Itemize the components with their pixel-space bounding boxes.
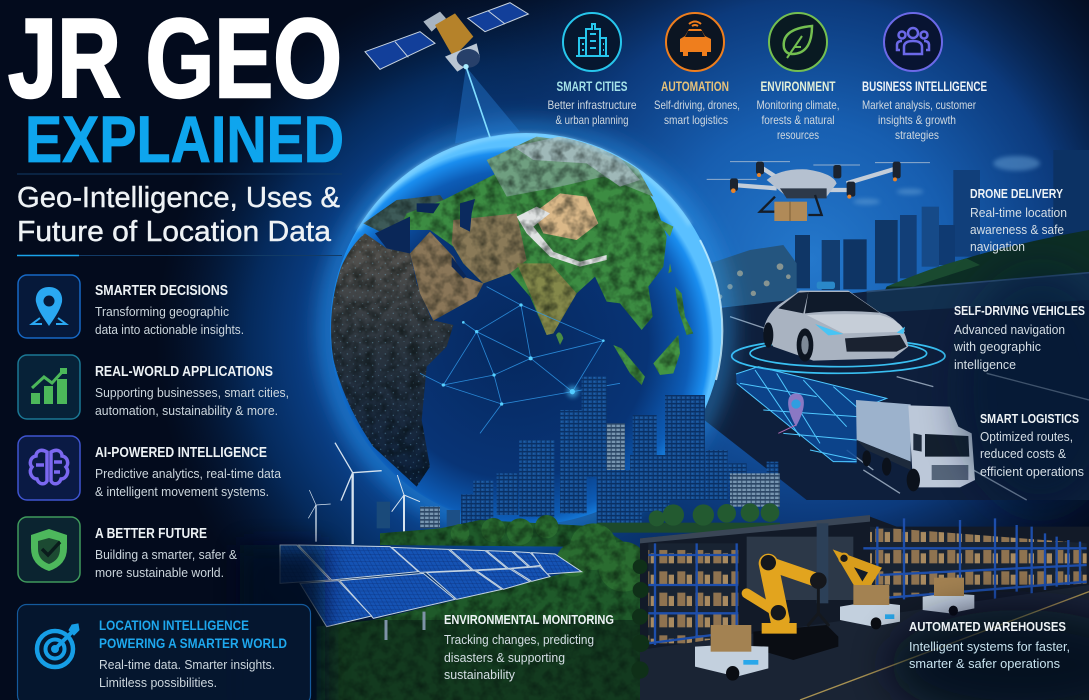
- text: business intelligence: Market analysis, customer: [862, 98, 976, 112]
- panel: smart cities: [548, 13, 637, 127]
- icon: connected car: [666, 13, 724, 71]
- icon: brain: [18, 436, 80, 500]
- text: ai-powered intelligence: [95, 445, 282, 499]
- continents: [327, 135, 693, 487]
- label: self-driving vehicles: with geographic: [953, 339, 1041, 354]
- panel: environment: [756, 13, 840, 142]
- callout text: Limitless possibilities.: [99, 675, 217, 690]
- callout text: [99, 618, 287, 690]
- wind turbines: [308, 443, 420, 544]
- text: real-world applications: [95, 364, 289, 418]
- label: self-driving vehicles: intelligence: [954, 357, 1016, 372]
- clouds: [853, 156, 1040, 205]
- floor: [640, 585, 1089, 700]
- foliage: [317, 515, 653, 700]
- scene: central city, wind turbines and solar farm: [280, 377, 780, 700]
- text: business intelligence: BUSINESS INTELLIGENCE: [862, 79, 987, 94]
- text: real-world applications: REAL-WORLD APPLICATIONS: [95, 364, 273, 380]
- delivery truck: [856, 400, 975, 491]
- subtitle: [17, 182, 340, 248]
- icon: location pin: [778, 393, 804, 433]
- subtitle: Geo-Intelligence, Uses &: [17, 182, 340, 214]
- label: automated warehouses: Intelligent systems for faster,: [909, 639, 1070, 654]
- world globe: [327, 132, 723, 526]
- shelving left: [648, 543, 738, 645]
- text: automation: smart logistics: [664, 113, 728, 127]
- globe glow: [329, 132, 723, 526]
- icon: shield check: [18, 517, 80, 582]
- robot arm 2: [839, 554, 875, 587]
- robot platform: [753, 625, 838, 660]
- label: self-driving vehicles: [953, 303, 1085, 372]
- top atmosphere rim: [358, 135, 690, 230]
- callout text: POWERING A SMARTER WORLD: [99, 636, 287, 651]
- text: ai-powered intelligence: AI-POWERED INTELLIGENCE: [95, 445, 267, 461]
- text: environment: [756, 79, 840, 142]
- panel: ai-powered intelligence: [18, 436, 282, 500]
- panel: automation: [654, 13, 740, 127]
- text: environment: Monitoring climate,: [756, 98, 840, 112]
- foliage edge: [631, 559, 649, 679]
- text: real-world applications: automation, sustainability & more.: [95, 403, 278, 418]
- panel: business intelligence: [862, 13, 987, 142]
- label: environmental monitoring: ENVIRONMENTAL MONITORING: [444, 612, 614, 627]
- text: business intelligence: strategies: [895, 128, 939, 142]
- text: smart cities: Better infrastructure: [548, 98, 637, 112]
- callout: location intelligence: [18, 604, 310, 700]
- text: business intelligence: [862, 79, 987, 142]
- label: drone delivery: [970, 186, 1067, 254]
- text: a better future: [95, 526, 237, 580]
- network lines: [420, 287, 620, 433]
- text: a better future: more sustainable world.: [95, 565, 224, 580]
- label: smart logistics: [980, 411, 1084, 479]
- scene: right city, sky and road: [410, 0, 1089, 660]
- label: environmental monitoring: sustainability: [444, 667, 515, 682]
- callout text: Real-time data. Smarter insights.: [99, 657, 275, 672]
- distant skyline: [710, 150, 1089, 307]
- text: environment: resources: [777, 128, 819, 142]
- satellite with beam: [365, 3, 528, 143]
- label: smart logistics: efficient operations: [980, 464, 1084, 479]
- panel: real-world applications: [18, 355, 289, 419]
- robot arm 1: [747, 555, 828, 628]
- text: smarter decisions: Transforming geographic: [95, 304, 229, 319]
- label: smart logistics: Optimized routes,: [980, 429, 1073, 444]
- text: automation: Self-driving, drones,: [654, 98, 740, 112]
- label: environmental monitoring: disasters & supporting: [444, 650, 565, 665]
- icon: city: [563, 13, 621, 71]
- panel: smarter decisions: [18, 275, 244, 338]
- text: real-world applications: Supporting businesses, smart cities,: [95, 385, 289, 400]
- label: environmental monitoring: [444, 612, 614, 682]
- text: automation: [654, 79, 740, 127]
- text: ai-powered intelligence: Predictive analytics, real-time data: [95, 466, 282, 481]
- text: smarter decisions: [95, 283, 244, 337]
- self-driving car: [732, 282, 945, 373]
- icon: people: [884, 13, 942, 71]
- network star: [567, 386, 579, 398]
- city trees and lawn: [597, 503, 780, 533]
- icon: target and arrow: [37, 624, 79, 667]
- solar panels: [280, 545, 582, 627]
- subtitle: Future of Location Data: [17, 216, 332, 248]
- text: environment: ENVIRONMENT: [760, 79, 836, 94]
- panel: a better future: [18, 517, 237, 582]
- inland seas: [460, 199, 475, 232]
- label: self-driving vehicles: Advanced navigation: [954, 322, 1065, 337]
- warehouse lower-right shading: [890, 610, 1089, 700]
- holographic map: [736, 367, 887, 463]
- label: smart logistics: reduced costs &: [980, 446, 1066, 461]
- left fade over solar farm: [240, 545, 325, 700]
- city towers: [377, 377, 780, 528]
- beam: [455, 67, 520, 143]
- text: a better future: Building a smarter, safer &: [95, 547, 237, 562]
- label: drone delivery: awareness & safe: [970, 222, 1064, 237]
- text: business intelligence: insights & growth: [878, 113, 956, 127]
- icon: map pin: [18, 275, 80, 338]
- callout text: LOCATION INTELLIGENCE: [99, 618, 249, 633]
- scene: automated warehouse: [631, 515, 1089, 700]
- label: drone delivery: DRONE DELIVERY: [970, 186, 1063, 201]
- warehouse robots and parcels: [695, 578, 974, 681]
- satellite body: [423, 12, 480, 72]
- label: automated warehouses: AUTOMATED WAREHOUSES: [909, 619, 1066, 634]
- text: automation: AUTOMATION: [661, 79, 729, 94]
- text: smart cities: [548, 79, 637, 127]
- label: environmental monitoring: Tracking changes, predicting: [444, 632, 594, 647]
- text: smarter decisions: SMARTER DECISIONS: [95, 283, 228, 299]
- text: a better future: A BETTER FUTURE: [95, 526, 207, 542]
- shelving right: [863, 518, 1087, 602]
- label: automated warehouses: [909, 619, 1070, 671]
- label: drone delivery: Real-time location: [970, 205, 1067, 220]
- text: ai-powered intelligence: & intelligent movement systems.: [95, 484, 269, 499]
- delivery drone: [707, 162, 930, 221]
- text: smart cities: & urban planning: [556, 113, 628, 127]
- road: [700, 273, 1089, 500]
- label: drone delivery: navigation: [970, 239, 1025, 254]
- title: EXPLAINED: EXPLAINED: [25, 102, 344, 176]
- Africa city lights: [327, 233, 453, 487]
- text: smart cities: SMART CITIES: [556, 79, 628, 94]
- title block: [8, 0, 344, 256]
- text: environment: forests & natural: [762, 113, 834, 127]
- text: smarter decisions: data into actionable insights.: [95, 322, 244, 337]
- solar panels: [365, 3, 528, 69]
- label: automated warehouses: smarter & safer operations: [909, 656, 1060, 671]
- icon: growth chart: [18, 355, 80, 419]
- icon: leaf: [769, 13, 827, 71]
